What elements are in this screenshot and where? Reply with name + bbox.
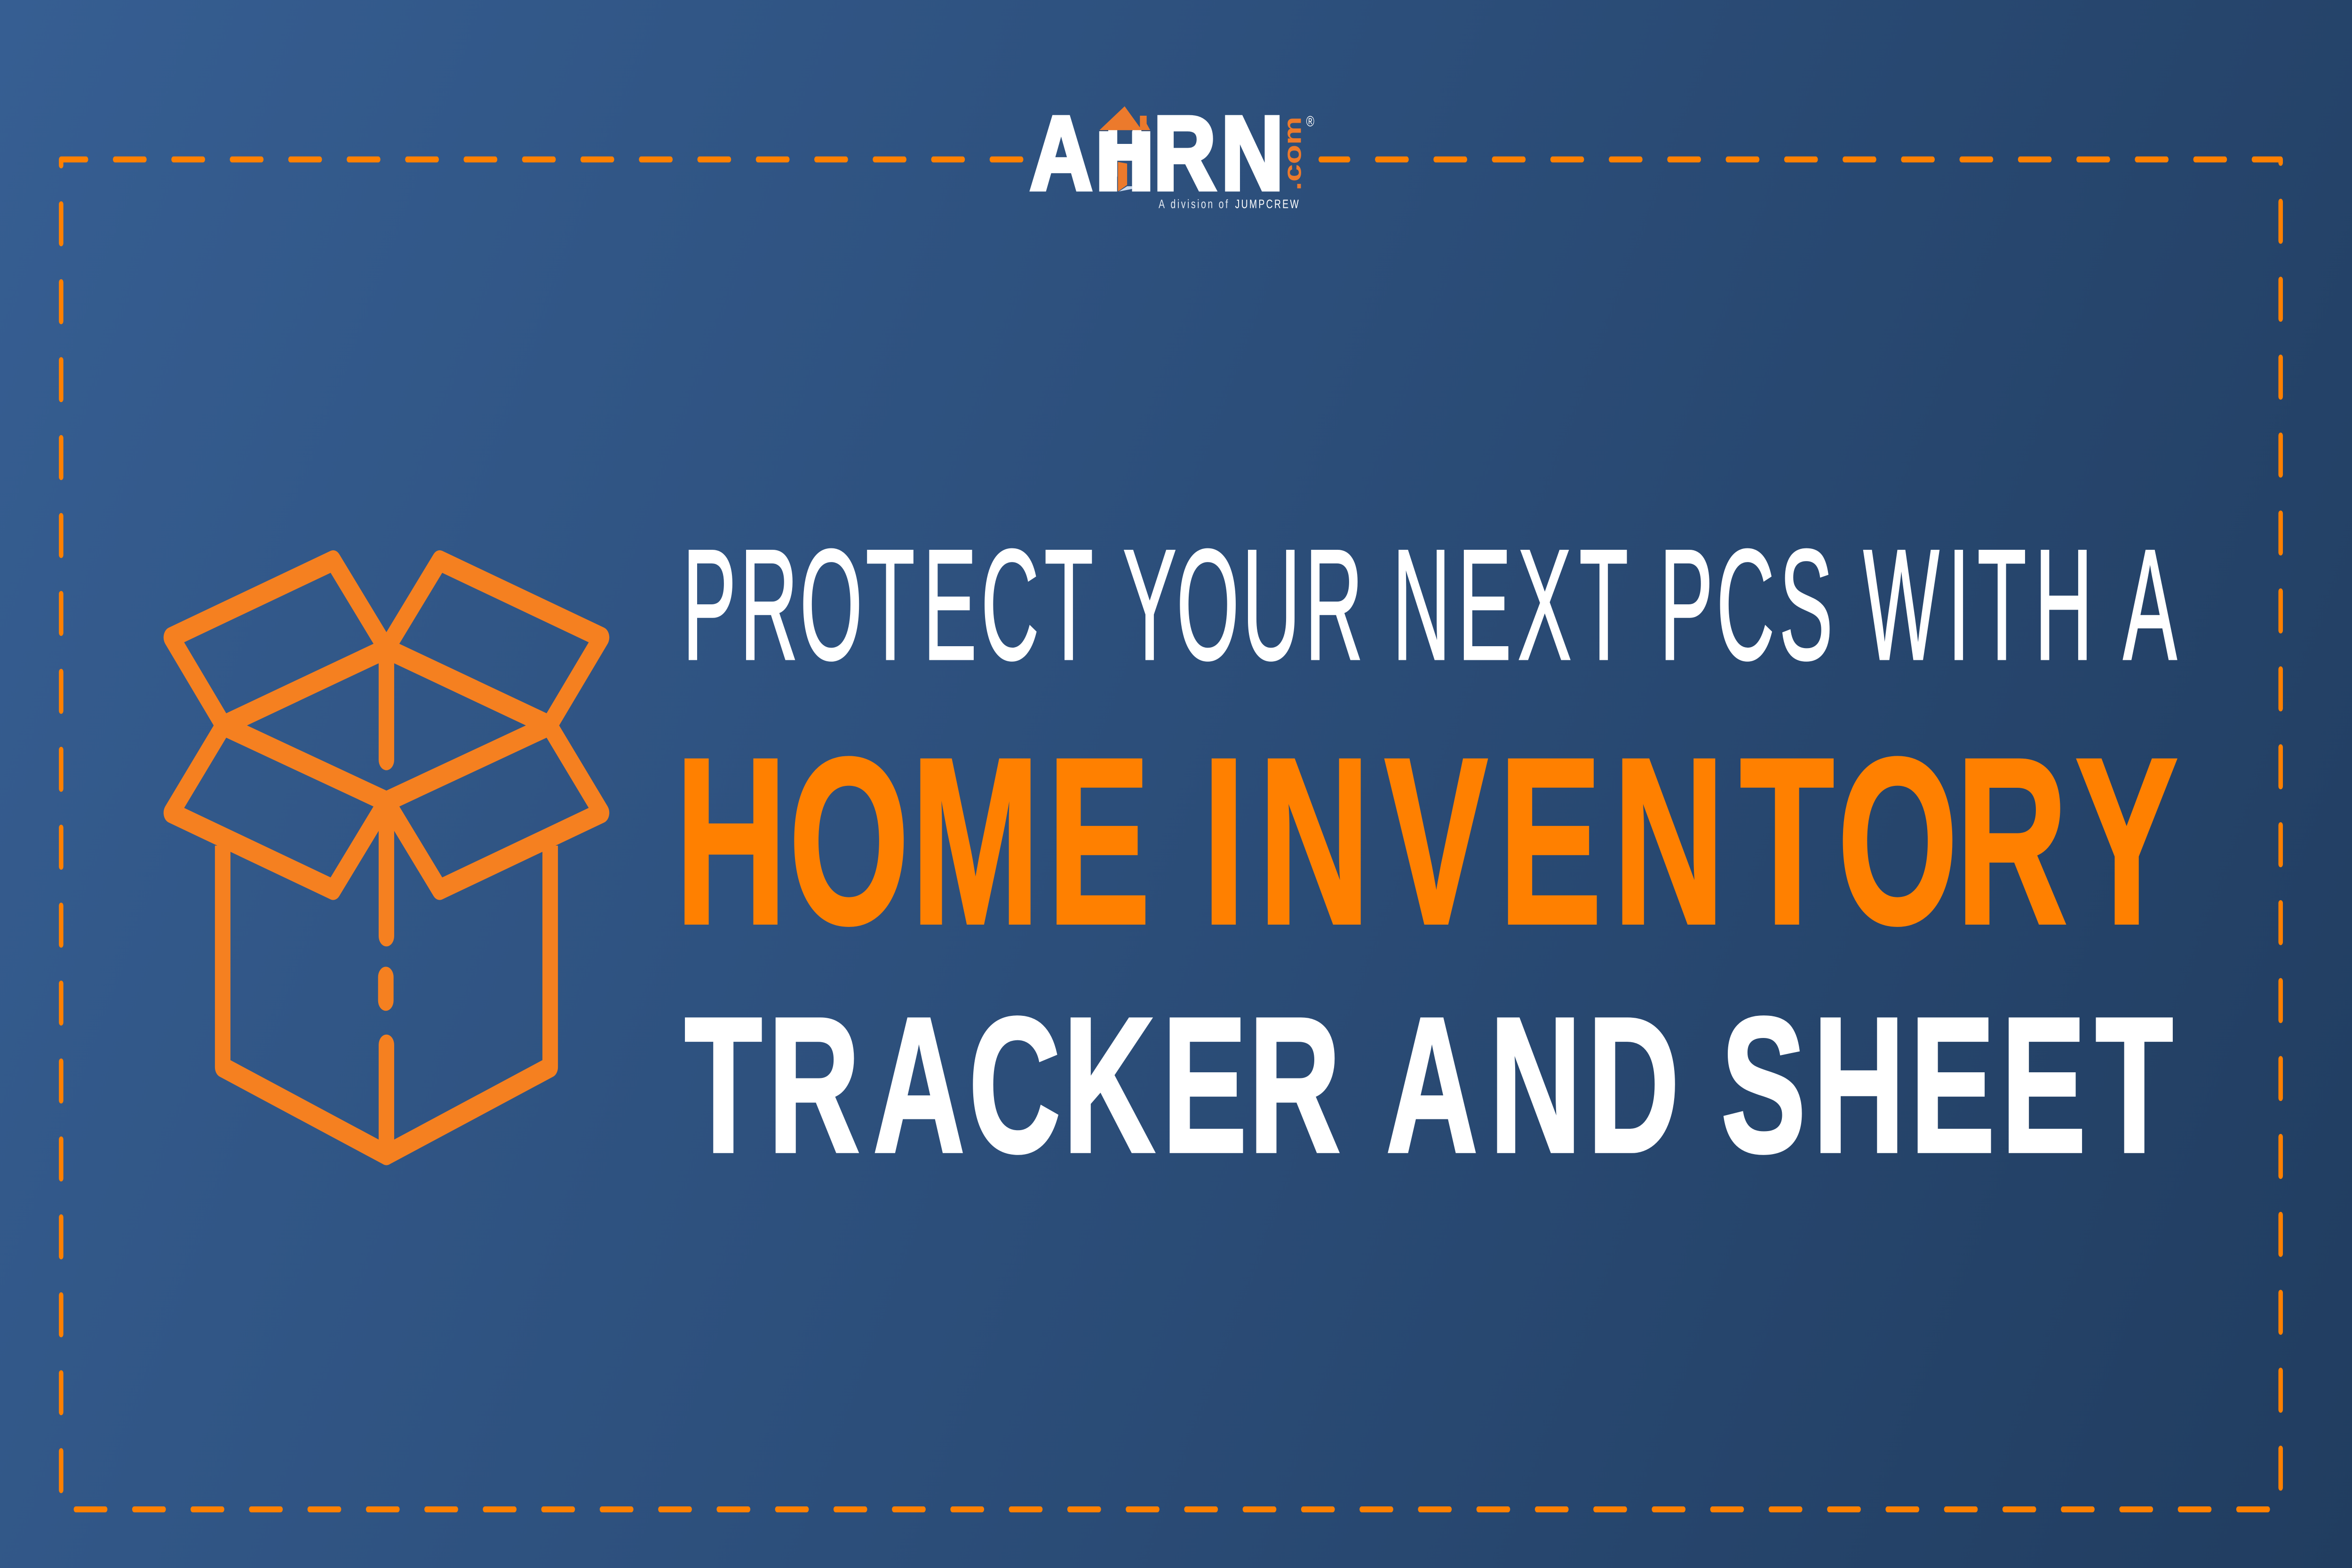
logo registered mark: ®: [1306, 112, 1314, 129]
logo .com: .com: [1279, 117, 1306, 190]
heading line 1: PROTECT YOUR NEXT PCS WITH A: [683, 516, 2177, 692]
icon: open cardboard box: [171, 561, 602, 1155]
logo wordmark: RN: [1153, 95, 1283, 212]
logo: AHRN.com: [1030, 95, 1314, 212]
heading: [675, 516, 2178, 1193]
logo tagline: JUMPCREW: [1235, 197, 1300, 211]
logo house body forming the H: [1099, 131, 1150, 191]
logo wordmark: H: [1105, 116, 1144, 190]
logo roof: [1099, 106, 1150, 130]
logo door: [1118, 162, 1127, 191]
heading line 2: HOME INVENTORY: [675, 709, 2178, 974]
logo tagline: A division of: [1159, 197, 1230, 211]
logo wordmark: A: [1030, 95, 1092, 212]
heading line 3: TRACKER AND SHEET: [684, 977, 2173, 1193]
logo doorstep: [1119, 186, 1132, 191]
